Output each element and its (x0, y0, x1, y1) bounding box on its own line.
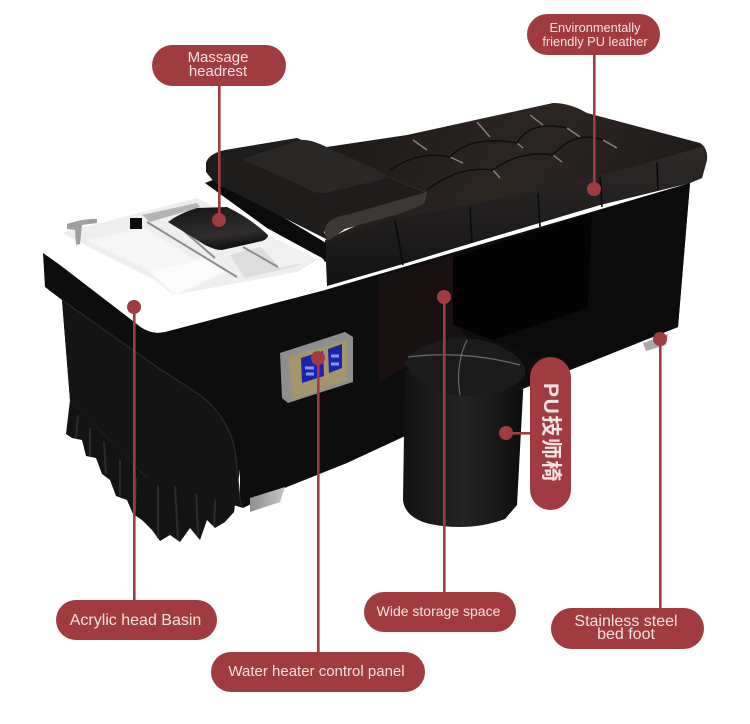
control panel (280, 332, 353, 403)
stool (403, 338, 525, 527)
label: Massage headrest: Massage (188, 49, 248, 66)
bed cushion with tufting (320, 103, 707, 286)
label: Wide storage space (364, 592, 516, 632)
bed base cabinet (43, 183, 690, 508)
icon: metal feet (250, 334, 668, 512)
label: Stainless steel bed foot (551, 608, 704, 649)
label: Stainless steel bed foot: bed foot (597, 626, 655, 643)
pillow (244, 140, 385, 193)
shampoo bed illustration (43, 103, 707, 542)
basin rails (147, 222, 278, 277)
label: Acrylic head Basin (56, 600, 217, 640)
label: Environmentally friendly PU leather: Environmentally (549, 20, 641, 35)
connector lines and dots (127, 55, 667, 652)
label: Massage headrest: headrest (189, 63, 248, 80)
label: Environmentally friendly PU leather: friendly PU leather (542, 34, 648, 49)
acrylic basin (48, 192, 325, 333)
label: Stainless steel bed foot: Stainless steel (574, 613, 678, 630)
label: Water heater control panel (211, 652, 425, 692)
skirt (66, 400, 240, 542)
label: Massage headrest (152, 45, 286, 86)
massage headrest pad (168, 207, 268, 250)
label: Water heater control panel: Water heater control panel (228, 663, 405, 680)
label: Environmentally friendly PU leather (527, 14, 660, 55)
label: Wide storage space: Wide storage space (377, 603, 501, 619)
label: PU technician stool: PU技师椅 (539, 383, 562, 483)
label: PU technician stool (530, 357, 571, 510)
label: Acrylic head Basin: Acrylic head Basin (70, 612, 201, 629)
faucet (67, 203, 200, 245)
head section cushion (205, 138, 427, 262)
